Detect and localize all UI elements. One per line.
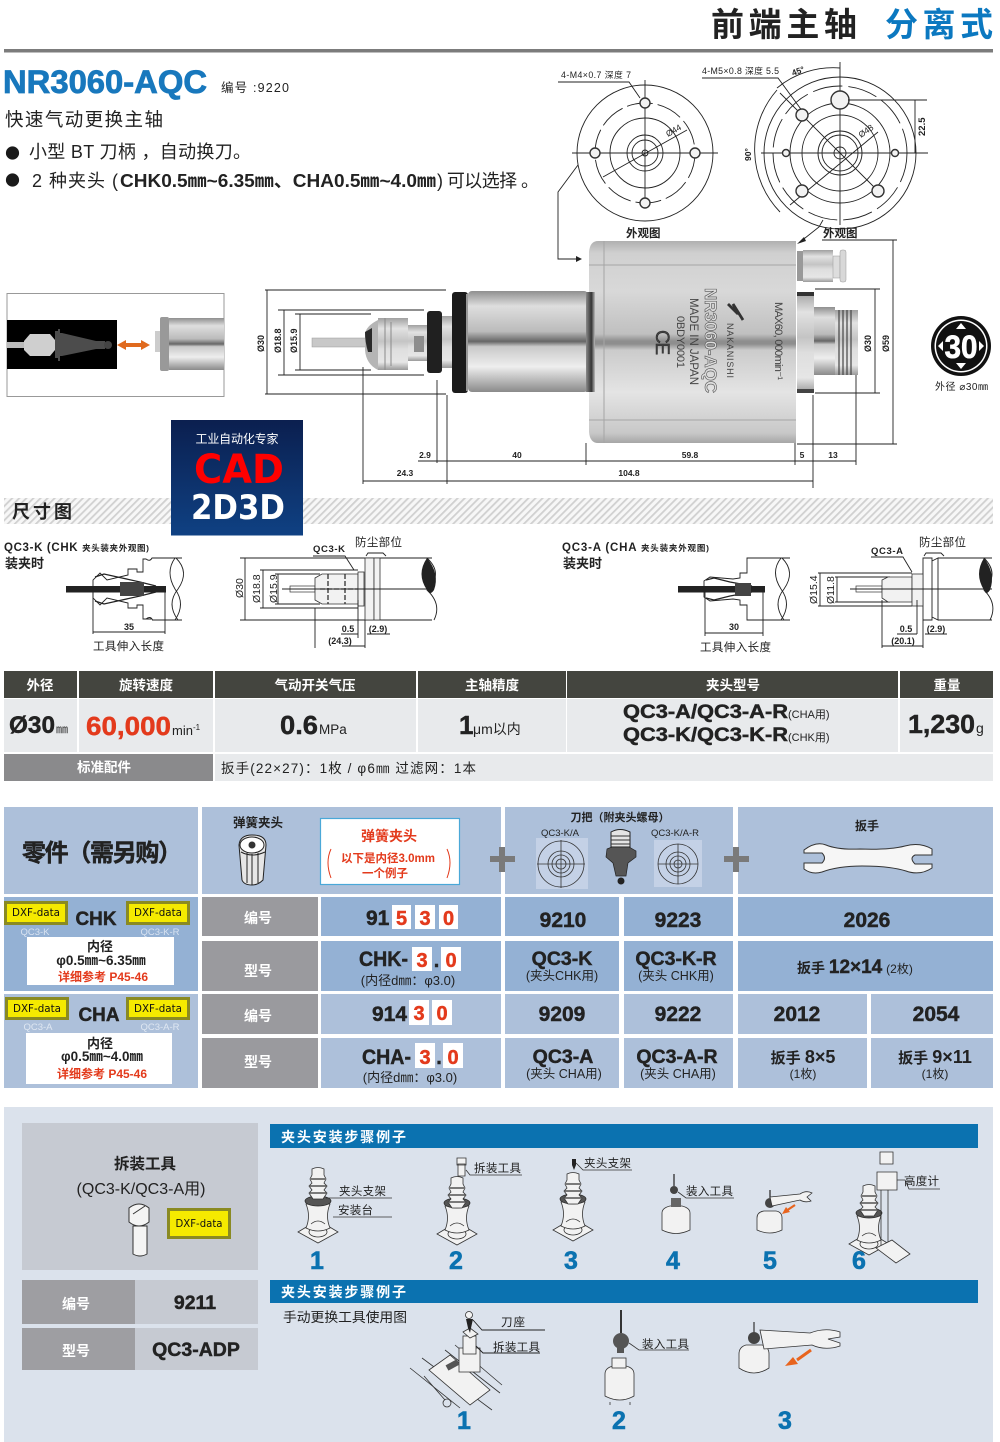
panel: collet header: 一个例子 [362, 866, 408, 880]
panel: QC3-K collet drawings: 0.5 [342, 624, 354, 634]
row: CHK collet info: DXF-data [12, 906, 60, 919]
panel: manual tool change: 夹头安装步骤例子 [281, 1284, 406, 1300]
row labels: 编号 [244, 1008, 272, 1024]
collet part numbers: 0 [443, 908, 454, 930]
holder and wrench part numbers: 2026 [844, 909, 890, 932]
holder and wrench part numbers: 扳手 12×14 (2枚) [797, 957, 913, 978]
panel: disassembly tool: 型号 [62, 1343, 90, 1359]
dimension lines: main spindle: 40 [512, 450, 522, 460]
spec table: min [172, 723, 193, 738]
panel: QC3-K collet drawings: 工具伸入长度 [93, 639, 164, 653]
title [711, 6, 993, 43]
holder and wrench part numbers: (夹头 CHA用) [640, 1067, 716, 1081]
spec table: QC3-A/QC3-A-R [623, 702, 788, 723]
row: CHK collet info: CHK [76, 909, 117, 930]
collet part numbers: 91 [366, 907, 390, 930]
diagram 1: vise: 1 [457, 1407, 471, 1435]
spec table: 扳手(22×27)：1枚 / φ6㎜ 过滤网：1本 [221, 761, 476, 776]
diagram 2: tool insert: 2 [612, 1407, 626, 1435]
diagram 2: tool insert [605, 1310, 690, 1435]
dimension lines: main spindle: 5 [800, 450, 805, 460]
spec table: 旋转速度 [119, 677, 173, 693]
dimension lines: main spindle: Ø18.8 [273, 328, 283, 353]
step 2: 2 [449, 1247, 463, 1275]
row: CHA collet info: 详细参考 P45-46 [57, 1066, 147, 1081]
panel: disassembly tool [22, 1123, 258, 1370]
end view drawing right: 22.5 [917, 117, 928, 136]
spec table: Ø30 [9, 712, 55, 739]
heading: parts sold separately: 零件（需另购） [22, 840, 182, 867]
spec table: 夹头型号 [706, 677, 760, 693]
step 5: 5 [763, 1247, 777, 1275]
panel: disassembly tool: 拆装工具 [114, 1155, 176, 1173]
product photo: spindle [312, 241, 858, 443]
spec table: 标准配件 [77, 760, 131, 775]
holder and wrench part numbers: 9222 [655, 1003, 701, 1026]
icon: plus sign [724, 847, 749, 872]
row labels [244, 910, 272, 1070]
end view drawing right: 4-M5×0.8 深度 5.5 [702, 65, 779, 76]
dimension lines: main spindle: Ø30 [863, 335, 873, 352]
panel: QC3-K collet drawings: 35 [124, 622, 134, 632]
row: CHA collet info: DXF-data [13, 1002, 61, 1015]
spec table [4, 671, 993, 781]
hatched section band [4, 498, 993, 524]
holder and wrench part numbers: 2054 [913, 1003, 960, 1026]
feature text [5, 109, 539, 191]
spec table: MPa [319, 722, 347, 737]
inset photo: tool change [7, 294, 224, 396]
row: CHA collet info: CHA [78, 1005, 120, 1026]
product photo: spindle: 0BDY0001 [674, 316, 686, 368]
panel: collet install steps: 夹头安装步骤例子 [281, 1129, 406, 1145]
holder and wrench part numbers: 2012 [774, 1003, 820, 1026]
diagram 1: vise: 拆装工具 [493, 1340, 540, 1354]
dimension lines: main spindle: 13 [828, 450, 838, 460]
diagram 3: wrench: 3 [778, 1407, 792, 1435]
holder and wrench part numbers: QC3-A-R [636, 1046, 718, 1068]
panel: collet header: 以下是内径3.0mm [341, 851, 435, 865]
icon: diameter 30 badge: 外径 ⌀30㎜ [935, 380, 988, 393]
row: CHA collet info: φ0.5㎜~4.0㎜ [61, 1049, 144, 1064]
row: CHA collet info: DXF-data [134, 1002, 182, 1015]
holder and wrench part numbers: (夹头CHK用) [526, 969, 598, 983]
panel: bottom background [4, 1107, 993, 1442]
spec table: 重量 [934, 678, 960, 693]
row labels: 型号 [244, 1054, 272, 1070]
row labels: 型号 [244, 963, 272, 979]
holder and wrench part numbers: QC3-A [533, 1046, 593, 1068]
end view drawing right: 45° [790, 64, 806, 78]
collet part numbers: 0 [447, 1047, 459, 1069]
holder and wrench part numbers: QC3-K [532, 948, 592, 970]
panel: QC3-K collet drawings: Ø30 [234, 578, 246, 598]
end view drawing right: 90° [743, 148, 753, 161]
dimension lines: main spindle: 104.8 [618, 468, 640, 478]
dimension lines: main spindle: Ø30 [256, 335, 266, 352]
holder and wrench part numbers: QC3-K-R [635, 948, 717, 970]
panel: collet install steps [270, 1124, 978, 1275]
spec table: g [976, 720, 984, 736]
step 1: 安装台 [338, 1203, 373, 1217]
icon: plus sign [490, 847, 515, 872]
feature text: CHK0.5㎜~6.35㎜、CHA0.5㎜~4.0㎜ [120, 171, 436, 191]
panel: QC3-K collet drawings: QC3-K (CHK 夹头装夹外观图) [4, 542, 149, 554]
collet part numbers: 0 [436, 1003, 448, 1025]
badge: CAD 2D3D: CAD [194, 447, 284, 493]
panel: QC3-K collet drawings: (24.3) [328, 636, 352, 646]
step 1: 1 [310, 1247, 324, 1275]
diagram 2: tool insert: 装入工具 [642, 1338, 690, 1351]
panel: QC3-A collet drawings: QC3-A [871, 546, 903, 557]
product photo: spindle: CE [651, 330, 672, 355]
panel: manual tool change: 手动更换工具使用图 [283, 1309, 407, 1325]
step 3 [553, 1157, 632, 1275]
row: CHK collet info [6, 902, 188, 985]
badge: CAD 2D3D [171, 420, 303, 536]
step 4: 4 [666, 1247, 680, 1275]
row: CHA collet info: QC3-A [23, 1022, 53, 1033]
panel: collet header: 弹簧夹头 [361, 828, 417, 844]
collet part numbers: . [434, 950, 439, 972]
step 3: 3 [564, 1247, 578, 1275]
dimension lines: main spindle [256, 240, 897, 488]
spec table: 外径 [26, 677, 54, 693]
step 6 [849, 1152, 940, 1275]
product photo: spindle: MAX60, 000min⁻¹ [772, 302, 784, 380]
step 4 [662, 1174, 734, 1275]
feature text: 2 种夹头 ( [32, 171, 118, 191]
row: CHK collet info: QC3-K [20, 927, 50, 938]
dimension lines: main spindle: 24.3 [397, 468, 414, 478]
step 1 [298, 1168, 392, 1275]
step 2 [437, 1158, 522, 1275]
panel: QC3-A collet drawings: (20.1) [891, 636, 915, 646]
panel: wrench header [804, 818, 932, 873]
panel: collet header [233, 815, 460, 885]
step 1: 夹头支架 [339, 1185, 386, 1198]
panel: tool holder header: 刀把（附夹头螺母） [570, 810, 670, 824]
spec table: (CHK用) [788, 732, 830, 744]
spec table: QC3-K/QC3-K-R [623, 725, 788, 746]
dimension lines: main spindle: Ø59 [881, 335, 891, 352]
collet part numbers: 3 [416, 950, 428, 972]
dimension lines: main spindle: Ø15.9 [289, 328, 299, 353]
spec table: 0.6 [280, 710, 318, 740]
panel: disassembly tool: (QC3-K/QC3-A用) [77, 1181, 205, 1198]
dimension lines: main spindle: 59.8 [682, 450, 699, 460]
collet part numbers [359, 905, 463, 1085]
panel: QC3-A collet drawings: 工具伸入长度 [700, 640, 772, 654]
panel: QC3-A collet drawings: 防尘部位 [919, 535, 966, 549]
spec table: ㎜ [56, 722, 68, 736]
holder and wrench part numbers: 扳手 9×11 [898, 1047, 972, 1067]
badge: CAD 2D3D: 工业自动化专家 [196, 431, 278, 446]
heading: dimensions: 尺寸图 [12, 502, 72, 522]
step 4: 装入工具 [686, 1185, 734, 1198]
panel: QC3-A collet drawings [562, 535, 993, 654]
step 6: 高度计 [904, 1174, 940, 1188]
end view drawing left: 4-M4×0.7 深度 7 [561, 69, 631, 80]
panel: disassembly tool: 9211 [174, 1292, 216, 1314]
title: 前端主轴 [711, 6, 857, 43]
holder and wrench part numbers: 9210 [540, 909, 586, 932]
panel: disassembly tool: DXF-data [176, 1217, 222, 1230]
collet part numbers: 3 [419, 1047, 431, 1069]
spec table: 气动开关气压 [274, 677, 356, 693]
panel: tool holder header: QC3-K/A-R [651, 828, 699, 839]
row labels: 编号 [244, 910, 272, 926]
end view drawing left [558, 69, 718, 262]
collet part numbers: 3 [419, 908, 431, 930]
feature text: 快速气动更换主轴 [5, 109, 163, 130]
panel: QC3-K collet drawings: QC3-K [313, 544, 345, 555]
row: CHK collet info: 详细参考 P45-46 [58, 969, 148, 984]
holder and wrench part numbers: 9209 [539, 1003, 585, 1026]
end view drawing right [702, 62, 928, 244]
title: 分离式 [885, 6, 993, 43]
collet part numbers: 914 [372, 1003, 407, 1026]
holder and wrench part numbers: (夹头 CHA用) [526, 1067, 602, 1081]
panel: tool holder header: QC3-K/A [541, 828, 580, 839]
end view drawing left: Ø44 [664, 122, 683, 139]
panel: wrench header: 扳手 [855, 818, 879, 833]
spec table: 60,000 [86, 711, 171, 741]
panel: QC3-K collet drawings: 防尘部位 [355, 535, 402, 549]
panel: QC3-K collet drawings: (2.9) [369, 624, 387, 634]
icon: diameter 30 badge [931, 316, 991, 393]
panel: QC3-A collet drawings: (2.9) [927, 624, 945, 634]
panel: QC3-A collet drawings: QC3-A (CHA 夹头装夹外观图) [562, 542, 709, 554]
panel: QC3-A collet drawings: 30 [729, 622, 739, 632]
collet part numbers: (内径d㎜：φ3.0) [361, 973, 455, 988]
product photo: spindle: NAKANISHI [725, 323, 735, 378]
collet part numbers: 0 [445, 950, 457, 972]
collet part numbers: . [436, 1047, 442, 1069]
feature text: 小型 BT 刀柄 ，自动换刀。 [29, 142, 251, 162]
step 6: 6 [852, 1247, 866, 1275]
model heading [3, 64, 289, 100]
panel: disassembly tool: 编号 [62, 1296, 90, 1312]
panel: QC3-A collet drawings: 0.5 [900, 624, 912, 634]
collet part numbers: 3 [413, 1003, 425, 1025]
step 5 [757, 1190, 812, 1275]
spec table: (CHA用) [788, 709, 830, 721]
panel: disassembly tool: QC3-ADP [152, 1339, 240, 1361]
panel: QC3-A collet drawings: Ø11.8 [825, 576, 837, 604]
model heading: NR3060-AQC [3, 64, 207, 100]
product photo: spindle: NR3060-AQC [701, 288, 719, 393]
spec table: -1 [193, 723, 201, 732]
row: CHA collet info: 内径 [87, 1036, 113, 1051]
end view drawing right: 外观图 [823, 226, 858, 240]
spec table: 1 [459, 710, 473, 740]
step 2: 拆装工具 [474, 1161, 522, 1175]
model heading: 编号 :9220 [221, 80, 289, 95]
collet part numbers: CHK- [359, 948, 408, 971]
icon: diameter 30 badge: 30 [944, 329, 978, 365]
dimension lines: main spindle: 2.9 [419, 450, 431, 460]
step 3: 夹头支架 [584, 1157, 631, 1170]
end view drawing right: Ø48 [856, 122, 876, 140]
row: CHA collet info [6, 998, 188, 1084]
spec table: 主轴精度 [465, 677, 519, 693]
diagram 3: wrench [739, 1322, 840, 1435]
holder and wrench part numbers: (夹头 CHK用) [638, 969, 714, 983]
panel: manual tool change [270, 1280, 978, 1435]
end view drawing left: 外观图 [626, 226, 660, 240]
spec table: μm以内 [473, 721, 521, 737]
row: CHK collet info: 内径 [87, 939, 113, 954]
panel: QC3-K collet drawings: 装夹时 [5, 556, 44, 571]
panel: collet header: 弹簧夹头 [233, 815, 283, 830]
holder and wrench part numbers: 9223 [655, 909, 701, 932]
diagram 1: vise: 刀座 [501, 1315, 525, 1329]
product photo: spindle: MADE IN JAPAN [687, 298, 699, 385]
collet part numbers: CHA- [362, 1046, 411, 1069]
parts table backgrounds [4, 807, 993, 1088]
spec table: 1,230 [908, 709, 975, 739]
row: CHK collet info: DXF-data [134, 906, 182, 919]
panel: QC3-A collet drawings: Ø15.4 [808, 575, 820, 604]
badge: CAD 2D3D: 2D3D [191, 488, 285, 528]
panel: QC3-K collet drawings: Ø15.9 [268, 574, 280, 603]
holder and wrench part numbers: 扳手 8×5 [771, 1047, 835, 1067]
holder and wrench part numbers [526, 909, 972, 1081]
holder and wrench part numbers: (1枚) [922, 1066, 948, 1081]
panel: QC3-K collet drawings [4, 535, 437, 653]
collet part numbers: (内径d㎜：φ3.0) [363, 1070, 457, 1085]
holder and wrench part numbers: (1枚) [790, 1066, 816, 1081]
row: CHK collet info: QC3-K-R [140, 927, 180, 938]
collet part numbers: 5 [396, 908, 407, 930]
row: CHA collet info: QC3-A-R [140, 1022, 180, 1033]
panel: tool holder header [536, 810, 702, 889]
feature text: ) 可以选择 。 [437, 171, 539, 191]
diagram 1: vise [410, 1312, 545, 1435]
panel: QC3-A collet drawings: 装夹时 [563, 556, 602, 571]
panel: QC3-K collet drawings: Ø18.8 [251, 574, 263, 603]
row: CHK collet info: φ0.5㎜~6.35㎜ [56, 953, 146, 968]
